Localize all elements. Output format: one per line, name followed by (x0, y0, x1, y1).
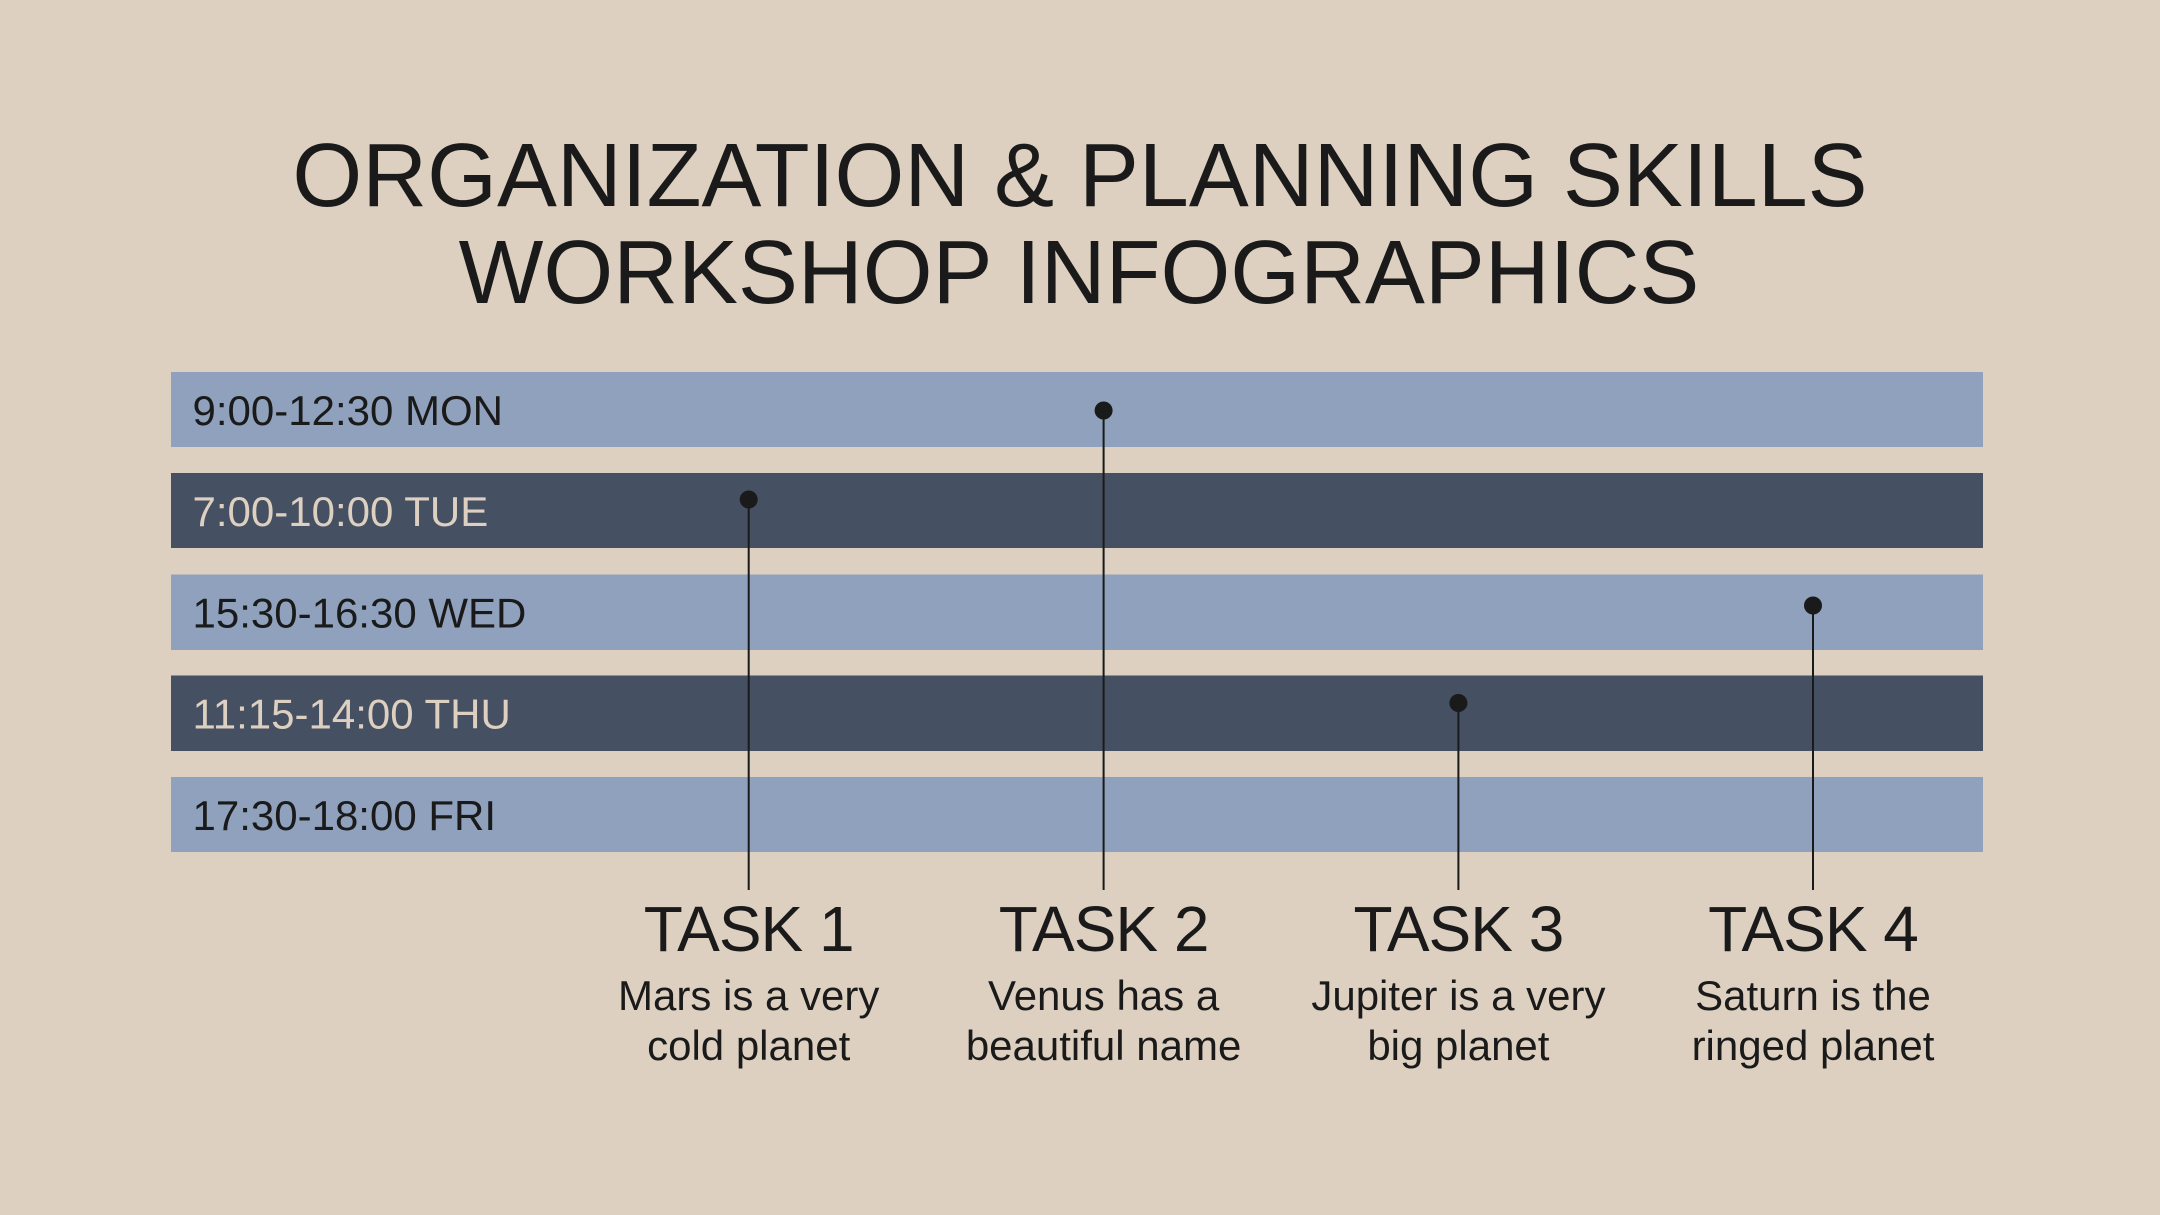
task 1 label (618, 893, 879, 1069)
row: Wednesday: 15:30-16:30 WED (192, 590, 526, 636)
row: Thursday: 11:15-14:00 THU (192, 690, 511, 738)
row: Monday: 9:00-12:30 MON (192, 387, 503, 434)
row: Monday (171, 372, 1983, 447)
row: Thursday (171, 676, 1983, 751)
task 4 label: ringed planet (1692, 1022, 1935, 1069)
task 2 label: TASK 2 (999, 893, 1208, 965)
title (292, 126, 1868, 323)
title: ORGANIZATION & PLANNING SKILLS (292, 126, 1868, 226)
row: Friday (171, 777, 1983, 852)
task 1 label: TASK 1 (644, 893, 854, 965)
task 4 label (1692, 893, 1935, 1069)
row: Tuesday: 7:00-10:00 TUE (192, 488, 488, 535)
task 2 label: Venus has a (988, 972, 1220, 1019)
title: WORKSHOP INFOGRAPHICS (459, 223, 1699, 323)
task 2 label (966, 893, 1241, 1069)
task 2 label: beautiful name (966, 1022, 1241, 1069)
schedule rows (171, 372, 1983, 852)
task 3 label (1311, 893, 1605, 1069)
task 3 label: big planet (1367, 1022, 1550, 1069)
marker: task 2 (1095, 402, 1113, 890)
task 4 label: TASK 4 (1708, 893, 1918, 965)
task 1 label: Mars is a very (618, 972, 879, 1019)
marker: task 4 (1804, 596, 1822, 890)
marker: task 1 (740, 490, 758, 890)
task 3 label: Jupiter is a very (1311, 972, 1605, 1019)
marker: task 3 (1449, 694, 1467, 890)
row: Wednesday (171, 574, 1983, 650)
row: Friday: 17:30-18:00 FRI (192, 792, 496, 839)
task 4 label: Saturn is the (1695, 972, 1931, 1019)
task 3 label: TASK 3 (1354, 893, 1563, 965)
row: Tuesday (171, 473, 1983, 548)
task 1 label: cold planet (647, 1022, 851, 1069)
